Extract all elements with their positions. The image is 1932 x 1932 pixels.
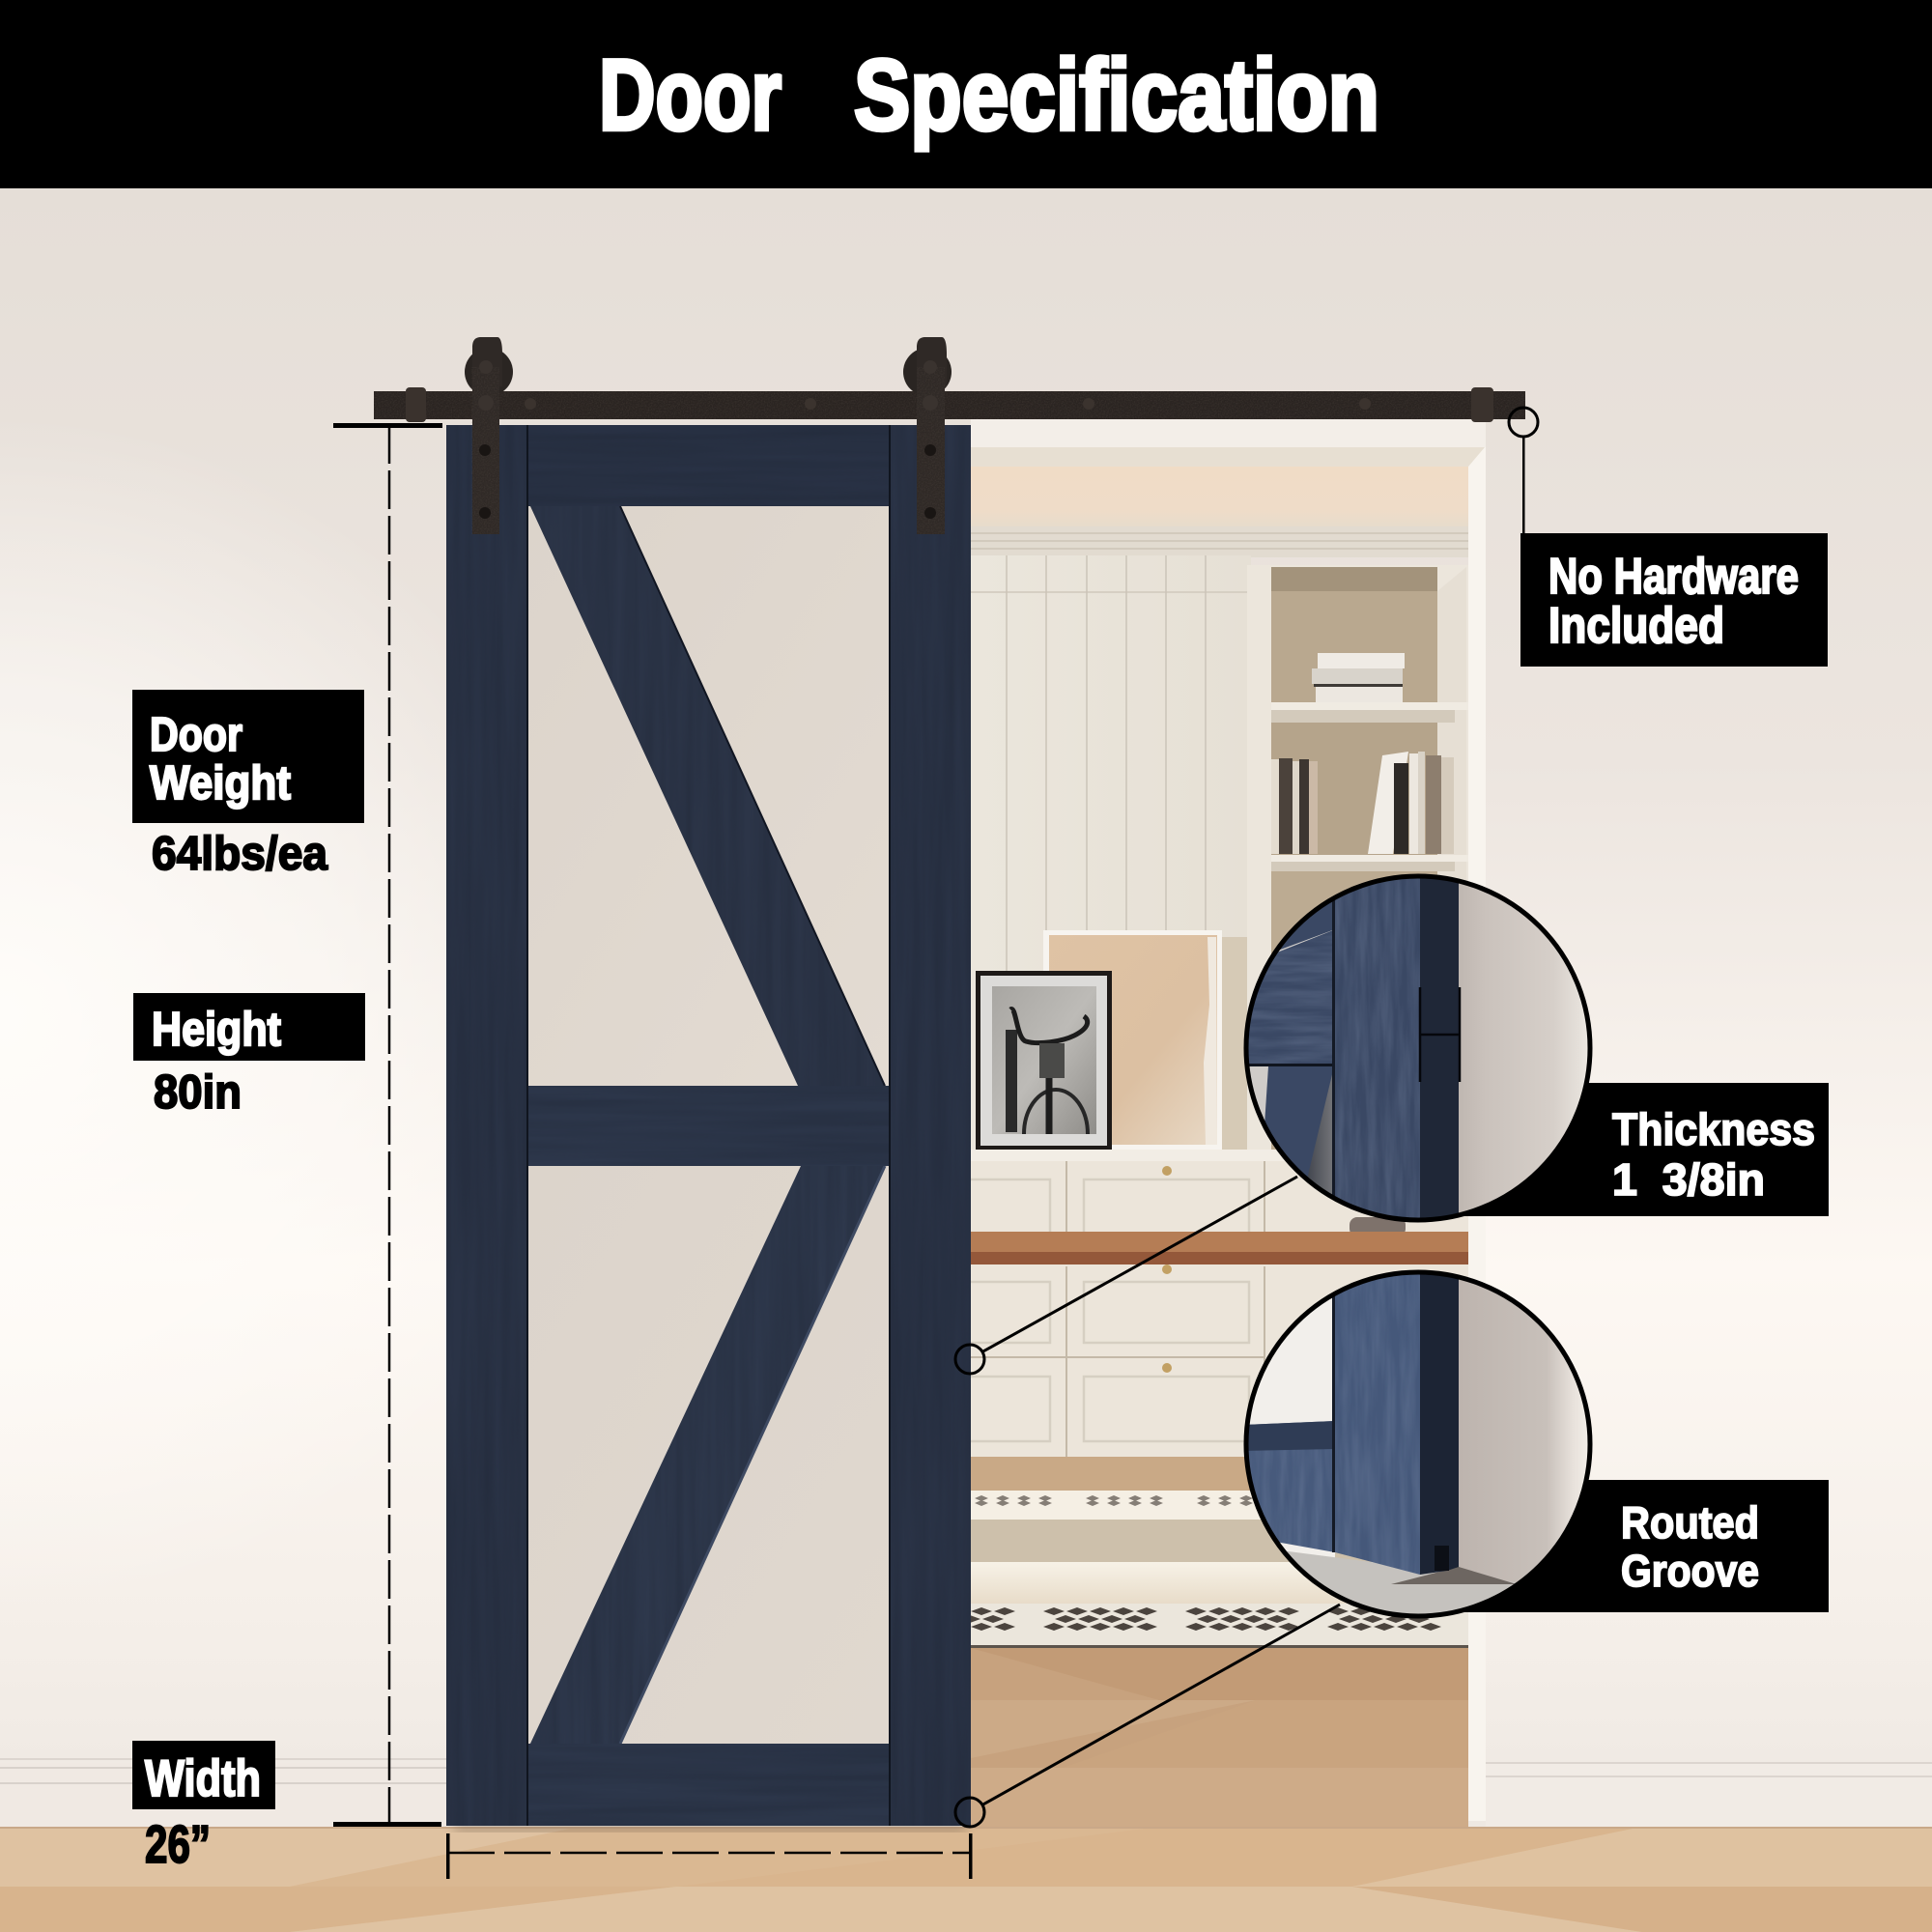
- left stile: [446, 425, 527, 1826]
- framed bicycle photo: [976, 971, 1112, 1151]
- callout: thickness: [955, 874, 1829, 1374]
- detail circle: door edge: [1243, 874, 1594, 1222]
- books lower shelf: [1271, 752, 1454, 854]
- label: height: [133, 993, 365, 1061]
- books upper shelf: [1312, 653, 1405, 702]
- door shadow on floor: [454, 1824, 966, 1832]
- bottom glass panel: [527, 1166, 890, 1744]
- detail circle: routed groove: [1243, 1270, 1594, 1623]
- room seen through doorway: [971, 467, 1468, 1827]
- lower diagonal brace: [530, 1166, 885, 1744]
- cabinets and counter: [971, 1150, 1468, 1458]
- track right bracket: [1471, 387, 1493, 422]
- height dimension line: [333, 423, 442, 1827]
- label: height: Height: [152, 1004, 281, 1056]
- label: door weight: Door: [150, 709, 242, 761]
- barn door: [446, 425, 971, 1826]
- crown moulding: [971, 526, 1468, 557]
- callout: no hardware included: No Hardware: [1548, 549, 1799, 605]
- bottom rail: [528, 1744, 889, 1826]
- label: width: Width: [145, 1750, 261, 1807]
- top rail: [528, 425, 889, 506]
- title: [599, 40, 1379, 152]
- bookcase: [1247, 565, 1468, 1183]
- value: door weight: 64lbs/ea: [152, 828, 328, 880]
- callout: thickness: Thickness: [1612, 1104, 1815, 1154]
- value: width: 26”: [145, 1814, 211, 1874]
- width dimension line: [446, 1833, 972, 1879]
- top glass panel: [527, 506, 890, 1086]
- track bolts: [525, 398, 1371, 410]
- left hanger: [465, 337, 513, 534]
- callout: routed groove: Routed: [1621, 1497, 1759, 1548]
- track left bracket: [406, 387, 426, 422]
- barn door track: [374, 387, 1525, 422]
- right hanger: [903, 337, 952, 534]
- callout: routed groove: Groove: [1621, 1546, 1759, 1596]
- floor: [0, 1827, 1932, 1932]
- title: Specification: [854, 40, 1379, 152]
- callout: no hardware included: Included: [1548, 598, 1724, 654]
- right stile: [890, 425, 971, 1826]
- upper diagonal brace: [530, 506, 885, 1086]
- leaning canvas art: [1043, 930, 1247, 1151]
- callout: thickness: 1 3/8in: [1612, 1154, 1765, 1205]
- label: door weight: [132, 690, 364, 823]
- callout: no hardware included: [1509, 408, 1828, 667]
- title: Door: [599, 40, 781, 152]
- doorway trim: [971, 419, 1486, 1821]
- middle rail: [528, 1086, 889, 1166]
- callout: routed groove: [955, 1270, 1829, 1827]
- title bar: [0, 0, 1932, 188]
- label: door weight: Weight: [150, 757, 291, 810]
- value: height: 80in: [154, 1066, 242, 1119]
- rug and inner floor: [971, 1457, 1468, 1827]
- ceiling glow: [971, 467, 1468, 528]
- beadboard back wall: [971, 555, 1251, 1174]
